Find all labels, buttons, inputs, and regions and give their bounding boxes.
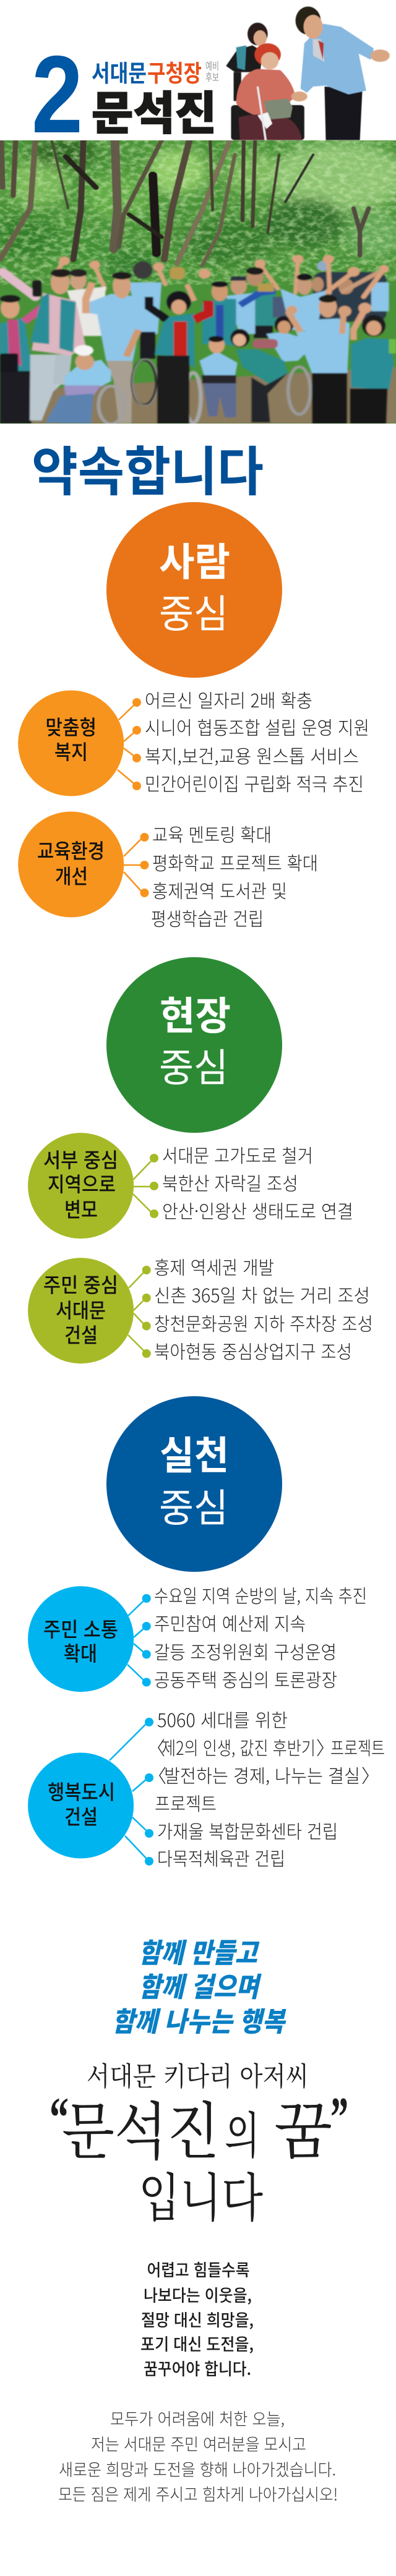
sub-topic: resident communication: 주민참여 예산제 지속: [154, 1609, 306, 1636]
bold message: 나보다는 이웃을,: [144, 2282, 252, 2306]
sub-topic: happy city: 프로젝트: [155, 1789, 217, 1816]
sub-topic: happy city: 〈: [147, 1733, 165, 1760]
woman in teal far left: [0, 317, 33, 371]
main heading: promise: 약속합니다: [32, 429, 264, 506]
sub-topic: education environment: 평생학습관 건립: [151, 904, 264, 931]
sub-topic: western hub: 지역으로: [48, 1168, 116, 1198]
sub-topic: happy city: 다목적체육관 건립: [157, 1844, 285, 1871]
big circle: field-centred: 중심: [159, 1037, 228, 1093]
sub-topic: customised welfare: 시니어 협동조합 설립 운영 지원: [145, 713, 369, 740]
sub-topic: education environment: [18, 811, 318, 931]
dream title: 의: [225, 2096, 260, 2167]
dream title: 문석진: [62, 2082, 220, 2171]
preliminary candidate note: 예비: [205, 58, 219, 73]
big circle: practice-centred: 중심: [159, 1477, 228, 1533]
woman far right: [351, 338, 394, 390]
sub-topic: western hub: 안산·인왕산 생태도로 연결: [162, 1196, 353, 1224]
sub-topic: resident-centred Seodaemun: 주민 중심: [43, 1269, 118, 1299]
preliminary candidate note: [205, 58, 219, 84]
sub-topic: resident communication: 갈등 조정위원회 구성운영: [154, 1637, 337, 1665]
sub-topic: customised welfare: 어르신 일자리 2배 확충: [145, 686, 312, 713]
sub-topic: customised welfare: 민간어린이집 구립화 적극 추진: [145, 769, 364, 796]
sub-topic: education environment: 개선: [55, 860, 88, 890]
sub-topic: education environment: 홍제권역 도서관 및: [152, 876, 287, 903]
sub-topic: happy city: [28, 1705, 385, 1871]
bending woman: [236, 349, 288, 385]
back row right: [313, 272, 386, 322]
people back middle: [252, 289, 277, 326]
sub-topic: resident-centred Seodaemun: 건설: [64, 1319, 98, 1349]
bold message: 절망 대신 희망을,: [141, 2307, 254, 2331]
big circle: people-centred: 사람: [159, 531, 230, 587]
sub-topic: resident-centred Seodaemun: 홍제 역세권 개발: [154, 1253, 274, 1280]
closing message: 모두가 어려움에 처한 오늘,: [110, 2406, 285, 2430]
sub-topic: happy city: 제2의 인생, 값진 후반기: [161, 1733, 316, 1760]
closing message: 모든 짐은 제게 주시고 힘차게 나아가십시오!: [58, 2481, 338, 2506]
sub-topic: resident-centred Seodaemun: 창천문화공원 지하 주차장 조성: [154, 1309, 373, 1336]
closing message: [58, 2406, 338, 2506]
sub-topic: education environment: 교육환경: [37, 835, 105, 864]
man with sunglasses in wheelchair: [267, 332, 311, 362]
slogan: 함께 나누는 행복: [112, 2000, 286, 2039]
sub-topic: western hub: 변모: [64, 1193, 98, 1223]
big circle: field-centred: [106, 957, 282, 1133]
sub-topic: happy city: 〈: [148, 1761, 166, 1788]
sub-topic: western hub: 서대문 고가도로 철거: [162, 1141, 313, 1168]
woman centre black and red: [155, 313, 194, 368]
panel: practice-centred: [28, 1396, 385, 1871]
sub-topic: customised welfare: 복지: [54, 736, 88, 766]
sub-topic: resident communication: 확대: [64, 1637, 97, 1667]
sub-topic: education environment: 교육 멘토링 확대: [152, 820, 272, 847]
big circle: field-centred: 현장: [160, 985, 231, 1041]
wheelchair woman centre: [199, 351, 238, 377]
sub-topic: resident communication: 공동주택 중심의 토론광장: [154, 1665, 337, 1692]
dream title: [50, 2082, 348, 2171]
tall uncle line: 서대문 키다리 아저씨: [87, 2056, 309, 2094]
blue shirt behind: [129, 283, 161, 335]
big circle: practice-centred: [106, 1396, 282, 1572]
big circle: people-centred: [106, 502, 282, 678]
candidate name: 문석진: [92, 77, 217, 143]
sub-topic: happy city: 〉: [361, 1761, 380, 1788]
district title: 서대문: [92, 54, 147, 88]
dream statement: [50, 2056, 348, 2232]
sub-topic: happy city: 행복도시: [48, 1776, 115, 1806]
slogan: 함께 걸으며: [139, 1965, 262, 2005]
man in polo: [288, 311, 350, 375]
preliminary candidate note: 후보: [205, 69, 219, 84]
bold message: [140, 2257, 254, 2380]
dream title: 꿈: [274, 2082, 332, 2171]
sub-topic: resident-centred Seodaemun: [28, 1253, 373, 1364]
sub-topic: happy city: 5060 세대를 위한: [157, 1705, 288, 1733]
closing word: 입니다: [139, 2157, 263, 2232]
big circle: practice-centred: 실천: [160, 1425, 229, 1481]
bold message: 꿈꾸어야 합니다.: [144, 2356, 251, 2380]
sub-topic: resident-centred Seodaemun: 서대문: [56, 1294, 106, 1324]
bold message: 포기 대신 도전을,: [140, 2331, 254, 2355]
panel: people-centred: [18, 502, 369, 931]
sub-topic: education environment: 평화학교 프로젝트 확대: [152, 848, 318, 876]
group photo in forest: [0, 140, 396, 424]
sub-topic: resident-centred Seodaemun: 북아현동 중심상업지구 조성: [154, 1337, 352, 1364]
ground: [0, 367, 396, 424]
dream title: “: [50, 2086, 69, 2149]
sub-topic: customised welfare: 복지,보건,교용 원스톱 서비스: [145, 741, 359, 769]
sub-topic: resident-centred Seodaemun: 신촌 365일 차 없는 거리 조성: [154, 1281, 370, 1308]
sub-topic: western hub: 북한산 자락길 조성: [162, 1169, 298, 1196]
closing message: 새로운 희망과 도전을 향해 나아가겠습니다.: [59, 2457, 336, 2481]
wheelchair rings: [98, 359, 311, 424]
slogan: 함께 만들고: [139, 1931, 260, 1971]
man in pink shirt and vest: [30, 354, 72, 420]
sub-topic: happy city: 건설: [64, 1801, 98, 1830]
panel: field-centred: [28, 957, 373, 1364]
closing message: 저는 서대문 주민 여러분을 모시고: [91, 2431, 306, 2455]
office title: 구청장: [147, 54, 202, 88]
big circle: people-centred: 중심: [159, 583, 228, 639]
sub-topic: western hub: [28, 1133, 353, 1239]
arms raised: [2, 260, 384, 297]
sub-topic: customised welfare: 맞춤형: [46, 711, 97, 741]
sub-topic: resident communication: 주민 소통: [43, 1613, 118, 1643]
sub-topic: happy city: 가재울 복합문화센타 건립: [157, 1817, 338, 1844]
ballot number 2: 2: [32, 33, 83, 156]
header: candidate identity: [32, 33, 219, 156]
bold message: 어렵고 힘들수록: [147, 2257, 250, 2281]
main man in blue shirt: [90, 294, 144, 363]
dream title: ”: [330, 2086, 348, 2149]
slogan: [112, 1931, 286, 2039]
sub-topic: happy city: 발전하는 경제, 나누는 결실: [164, 1761, 360, 1788]
sub-topic: happy city: 〉: [316, 1733, 335, 1760]
wheelchair man front: [64, 360, 111, 394]
sub-topic: western hub: 서부 중심: [43, 1144, 118, 1174]
header photo: candidate with wheelchair user: [226, 7, 390, 140]
man in white vest: [67, 286, 106, 336]
sub-topic: resident communication: [28, 1581, 367, 1692]
sub-topic: customised welfare: [18, 686, 369, 796]
